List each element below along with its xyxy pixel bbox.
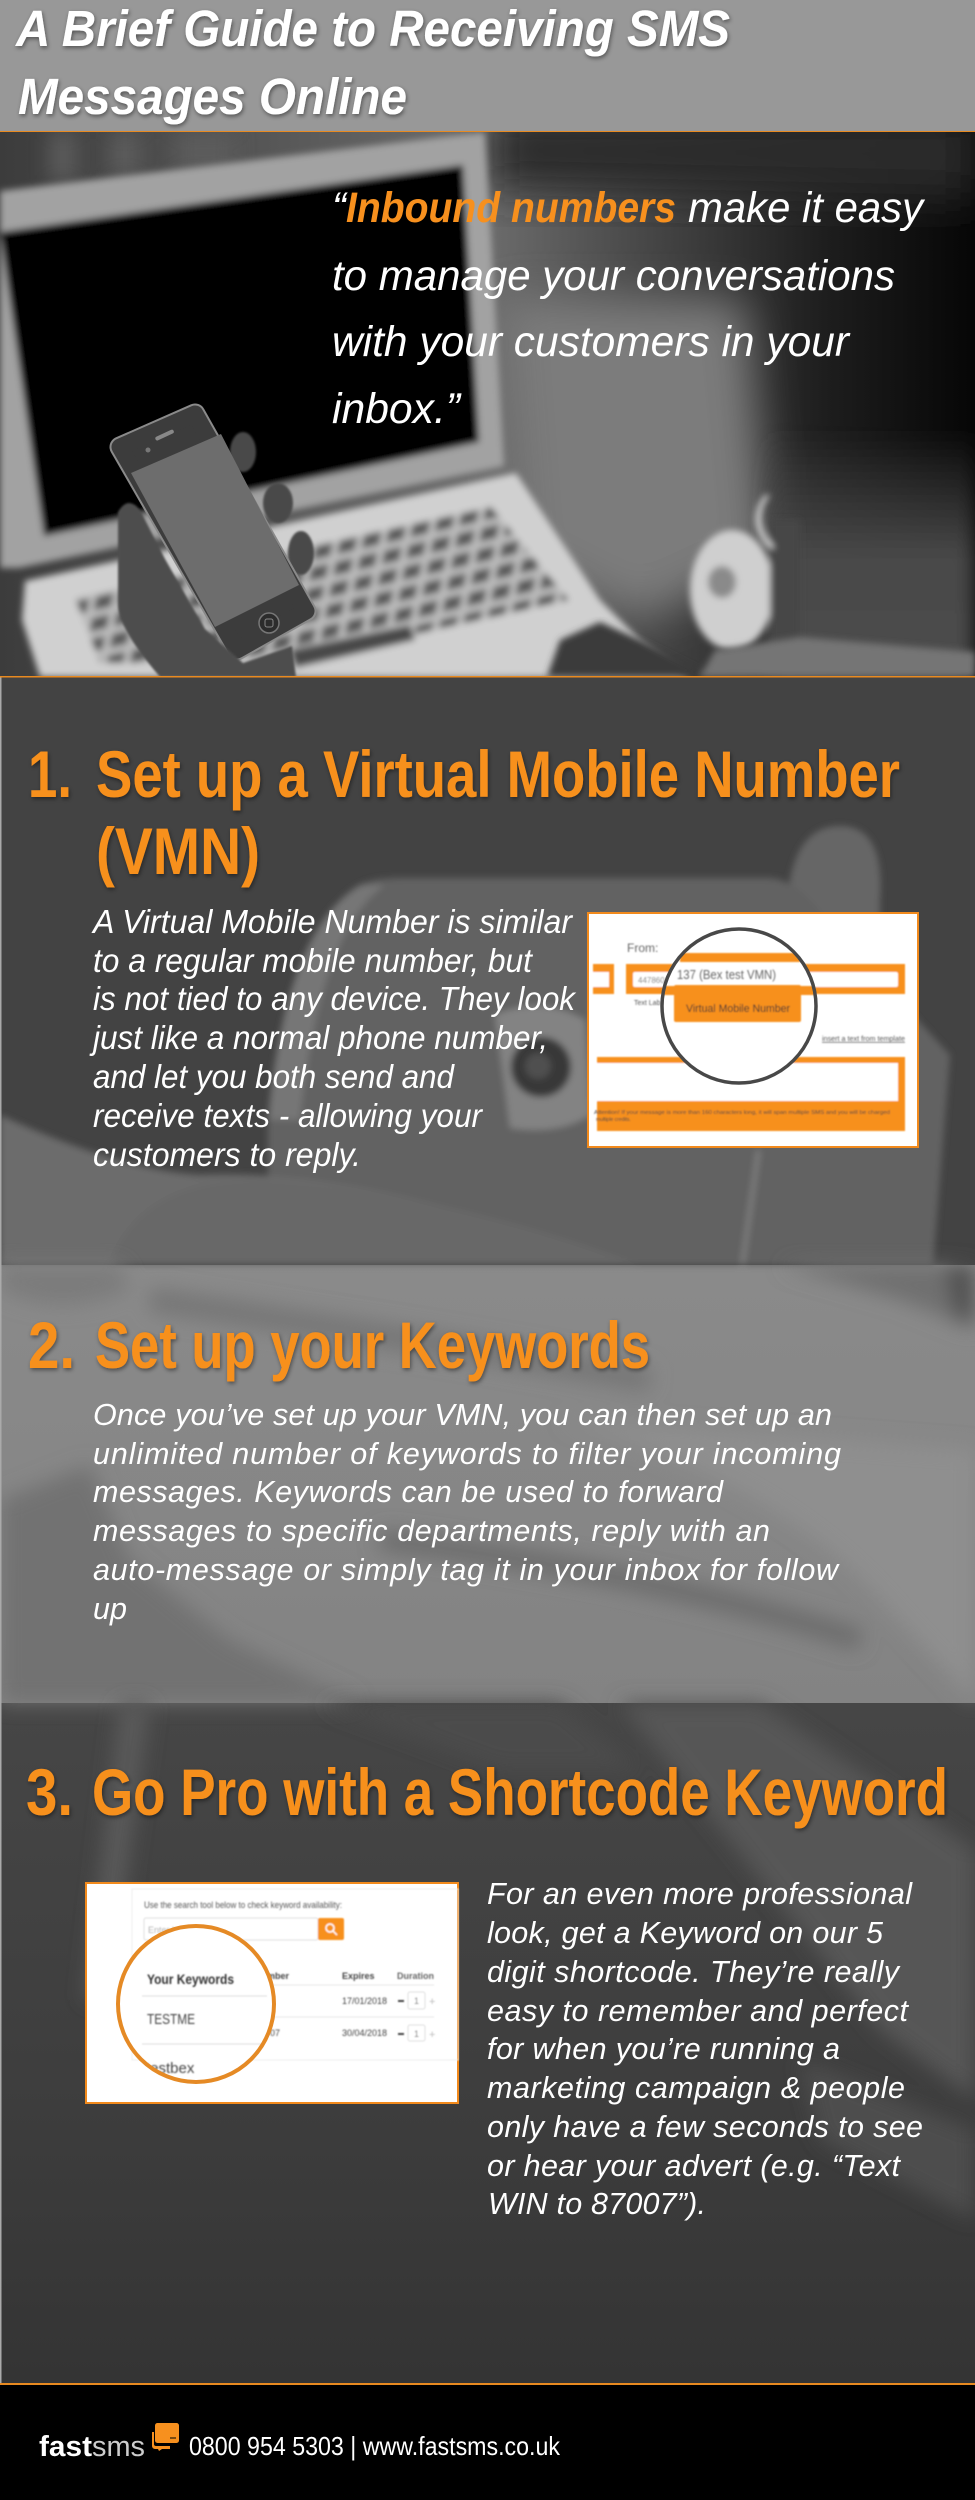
text block: step 1: is not tied to any device. They look	[93, 980, 576, 1017]
text block: step 1: receive texts - allowing your	[93, 1097, 484, 1134]
text block: step 2: auto-message or simply tag it in your inbox for follow	[93, 1553, 840, 1587]
text block: step 3	[487, 1877, 923, 2221]
text block: step 2: unlimited number of keywords to filter your incoming	[93, 1437, 841, 1471]
heading: step 1	[28, 737, 900, 888]
quote: with your customers in your	[332, 318, 851, 366]
screenshot: virtual mobile number form	[588, 913, 918, 1147]
panel: hero photo of phone and laptop	[0, 110, 975, 680]
quote: make it easy	[688, 184, 925, 232]
fingers (section 3)	[85, 1703, 975, 2220]
screenshot: virtual mobile number form: From:	[627, 941, 658, 955]
text block: step 3: only have a few seconds to see	[487, 2110, 923, 2144]
magnifier circle	[118, 1926, 274, 2082]
contact details: 0800 954 5303 | www.fastsms.co.uk	[189, 2431, 561, 2461]
screenshot: virtual mobile number form: Text Lab	[634, 1000, 661, 1007]
icon: smartphone	[120, 414, 306, 650]
text block: step 1: just like a normal phone number,	[89, 1019, 548, 1056]
screenshot: keyword search: 17/01/2018	[342, 1996, 387, 2006]
hand holding phone	[118, 503, 296, 677]
text block: step 2: messages. Keywords can be used to forward	[93, 1475, 724, 1509]
text block: step 3: for when you’re running a	[487, 2032, 840, 2066]
logo: fastsms	[39, 2423, 179, 2463]
quote: to manage your conversations	[332, 252, 895, 300]
logo: fastsms: sms	[92, 2431, 145, 2463]
coffee cup	[686, 491, 779, 652]
text block: step 1: and let you both send and	[93, 1058, 456, 1095]
screenshot: keyword search: 1	[414, 1996, 419, 2006]
magnifier circle: testbex	[146, 2060, 195, 2077]
title: Messages Online	[18, 68, 407, 125]
heading: step 1: (VMN)	[96, 814, 260, 888]
laptop lid	[0, 132, 504, 568]
text block: step 2	[93, 1398, 841, 1626]
heading: step 2: Set up your Keywords	[95, 1308, 650, 1382]
quote: inbox.”	[332, 385, 462, 433]
magnifier circle: Your Keywords	[147, 1971, 234, 1987]
title: A Brief Guide to Receiving SMS	[14, 0, 730, 57]
magnifier circle: TESTME	[147, 2011, 195, 2028]
screenshot: virtual mobile number form: insert a text from template	[822, 1036, 905, 1043]
text block: step 2: messages to specific departments, reply with an	[93, 1514, 770, 1548]
heading: step 3: 3.	[26, 1755, 73, 1829]
text block: step 3: For an even more professional	[487, 1877, 913, 1911]
screenshot: keyword search: Duration	[397, 1971, 434, 1981]
screenshot: keyword search: 07	[270, 2028, 280, 2038]
screenshot: virtual mobile number form: multiple credits.	[596, 1117, 631, 1123]
screenshot: virtual mobile number form: Attention! If your message is more than 160 characters long, it will span multiple SMS and you will be charged	[594, 1110, 890, 1116]
screenshot: keyword search: mber	[267, 1971, 290, 1981]
text block: step 1	[89, 903, 576, 1173]
heading: step 1: 1.	[28, 737, 72, 811]
text block: step 3: look, get a Keyword on our 5	[487, 1916, 884, 1950]
screenshot: keyword search: Use the search tool below to check keyword availability:	[144, 1900, 342, 1911]
screenshot: virtual mobile number form: 447860	[638, 976, 665, 985]
text block: step 3: digit shortcode. They’re really	[487, 1955, 901, 1989]
text block: step 1: A Virtual Mobile Number is similar	[91, 903, 574, 940]
fingers behind phone	[230, 432, 314, 575]
text block: step 1: customers to reply.	[93, 1136, 361, 1173]
text block: step 3: or hear your advert (e.g. “Text	[487, 2149, 902, 2183]
screenshot: keyword search: Expires	[342, 1971, 375, 1981]
screenshot: keyword search: Enter ke	[148, 1925, 182, 1935]
hand on laptop	[547, 622, 975, 677]
text block: step 1: to a regular mobile number, but	[93, 942, 534, 979]
screenshot: keyword search: +	[429, 2029, 435, 2041]
laptop base and keyboard	[22, 473, 690, 677]
magnifier circle: 137 (Bex test VMN)	[677, 967, 776, 982]
title band	[0, 0, 975, 132]
screenshot: keyword search: 1	[414, 2029, 419, 2039]
screenshot: keyword search	[86, 1883, 458, 2103]
screenshot: keyword search: 0	[270, 1996, 275, 2006]
phone in hand (section 1)	[0, 826, 950, 1265]
fingers (section 2)	[0, 1265, 975, 1703]
text block: step 2: Once you’ve set up your VMN, you can then set up an	[93, 1398, 832, 1432]
title	[14, 0, 730, 125]
text block: step 3: WIN to 87007”).	[488, 2187, 706, 2221]
text block: step 3: easy to remember and perfect	[487, 1994, 910, 2028]
footer	[0, 2385, 975, 2500]
text block: step 2: up	[93, 1592, 127, 1626]
magnifier circle	[660, 929, 820, 1083]
screenshot: keyword search: +	[429, 1996, 435, 2008]
magnifier circle: Virtual Mobile Number	[686, 1003, 790, 1015]
screenshot: keyword search: 30/04/2018	[342, 2028, 387, 2038]
quote	[332, 184, 925, 433]
text block: step 3: marketing campaign & people	[487, 2071, 905, 2105]
panel: section backgrounds photo	[0, 677, 975, 2384]
heading: step 2: 2.	[28, 1308, 75, 1382]
quote: Inbound numbers	[346, 184, 676, 232]
logo: fastsms: fast	[39, 2431, 92, 2463]
quote: “	[332, 184, 349, 232]
